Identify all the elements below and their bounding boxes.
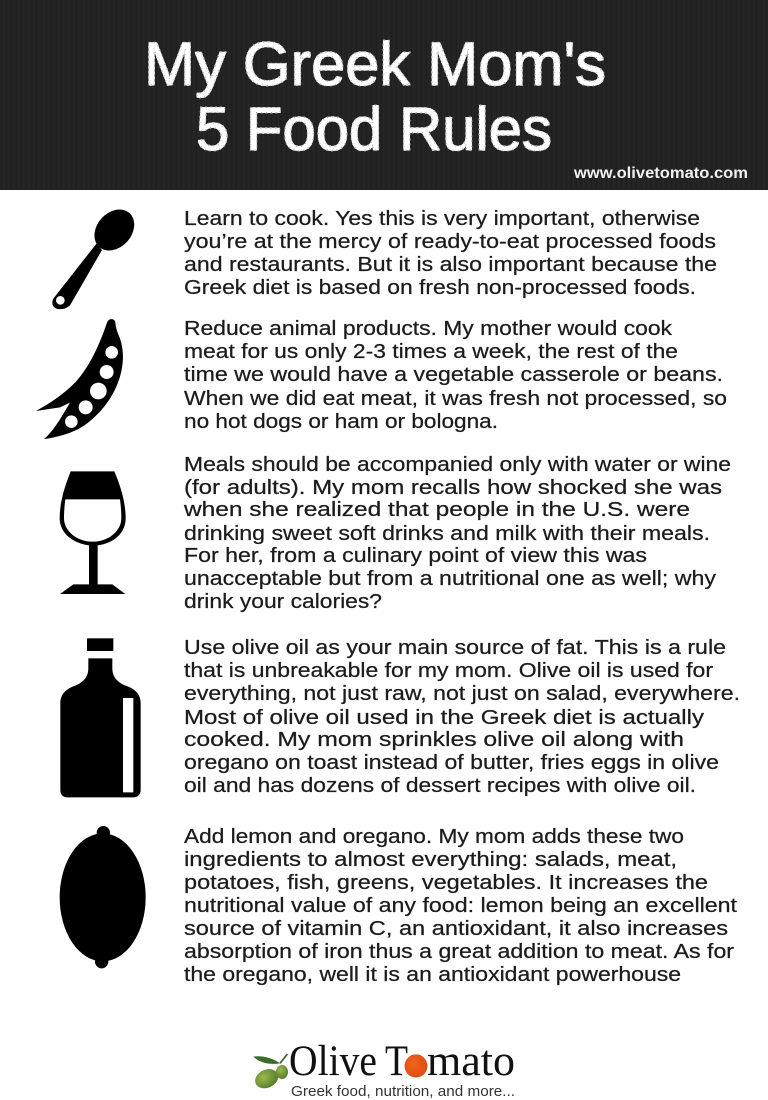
rule 1 text: Learn to cook. Yes this is very important, otherwise	[184, 208, 700, 230]
rule 3 text: when she realized that people in the U.S. were	[183, 499, 690, 521]
header banner	[0, 0, 768, 190]
icon: pea pod	[36, 319, 123, 439]
rule 2 text	[184, 318, 727, 433]
rule 5: lemon and oregano	[60, 826, 738, 986]
rule 5 text: absorption of iron thus a great addition to meat. As for	[184, 941, 734, 963]
website url: www.olivetomato.com	[573, 165, 748, 182]
rule 4 text: that is unbreakable for my mom. Olive oil is used for	[184, 660, 713, 682]
rule 5 text: potatoes, fish, greens, vegetables. It increases the	[184, 872, 708, 894]
icon: lemon	[60, 826, 146, 968]
icon: wine glass	[60, 471, 126, 594]
title: My Greek Mom's	[144, 30, 606, 98]
rule 5 text: source of vitamin C, an antioxidant, it also increases	[184, 918, 728, 940]
logo wordmark: Olive	[289, 1038, 377, 1085]
rule 2 text: no hot dogs or ham or bologna.	[184, 411, 498, 433]
rule 5 text: nutritional value of any food: lemon being an excellent	[184, 895, 738, 917]
icon: tomato	[404, 1054, 428, 1078]
logo wordmark	[289, 1038, 515, 1085]
rule 4 text	[184, 637, 740, 797]
rule 4: olive oil	[60, 637, 740, 797]
rule 3 text: drink your calories?	[184, 591, 382, 613]
rule 4 text: oil and has dozens of dessert recipes with olive oil.	[184, 775, 696, 797]
rule 2 text: time we would have a vegetable casserole or beans.	[184, 364, 723, 386]
rule 4 text: Use olive oil as your main source of fat. This is a rule	[184, 637, 726, 659]
rule 4 text: cooked. My mom sprinkles olive oil along with	[184, 729, 684, 751]
rule 3 text: unacceptable but from a nutritional one as well; why	[184, 568, 716, 590]
rule 5 text: Add lemon and oregano. My mom adds these two	[184, 826, 684, 848]
rule 2 text: When we did eat meat, it was fresh not processed, so	[184, 388, 727, 410]
rule 5 text: the oregano, well it is an antioxidant powerhouse	[184, 964, 681, 986]
rule 1 text: Greek diet is based on fresh non-processed foods.	[184, 277, 696, 299]
logo wordmark: omato	[405, 1038, 515, 1085]
rule 1 text	[184, 208, 717, 299]
title: 5 Food Rules	[196, 95, 552, 163]
rule 3: water or wine	[60, 454, 731, 613]
logo: Olive Tomato	[252, 1038, 515, 1100]
rule 1: learn to cook	[52, 202, 717, 309]
rule 1 text: and restaurants. But it is also important because the	[184, 254, 717, 276]
icon: spoon	[52, 202, 142, 309]
rule 5 text	[184, 826, 738, 986]
rule 2 text: Reduce animal products. My mother would cook	[184, 318, 673, 340]
logo tagline: Greek food, nutrition, and more...	[291, 1083, 515, 1100]
rule 4 text: Most of olive oil used in the Greek diet is actually	[184, 707, 704, 729]
rule 4 text: everything, not just raw, not just on salad, everywhere.	[184, 683, 740, 705]
rule 3 text: drinking sweet soft drinks and milk with their meals.	[184, 523, 710, 545]
rule 1 text: you’re at the mercy of ready-to-eat processed foods	[184, 231, 716, 253]
rule 3 text: Meals should be accompanied only with water or wine	[184, 454, 731, 476]
logo wordmark: T	[385, 1038, 408, 1085]
rule 4 text: oregano on toast instead of butter, fries eggs in olive	[184, 752, 719, 774]
rule 2 text: meat for us only 2-3 times a week, the rest of the	[184, 341, 678, 363]
rule 3 text	[183, 454, 731, 613]
rule 3 text: (for adults). My mom recalls how shocked she was	[184, 477, 722, 499]
rule 5 text: ingredients to almost everything: salads, meat,	[184, 849, 677, 871]
rule 3 text: For her, from a culinary point of view this was	[184, 545, 647, 567]
icon: olive oil bottle	[60, 638, 141, 797]
icon: olive branch	[252, 1054, 288, 1092]
rule 2: reduce animal products	[36, 318, 727, 439]
title	[144, 30, 606, 163]
